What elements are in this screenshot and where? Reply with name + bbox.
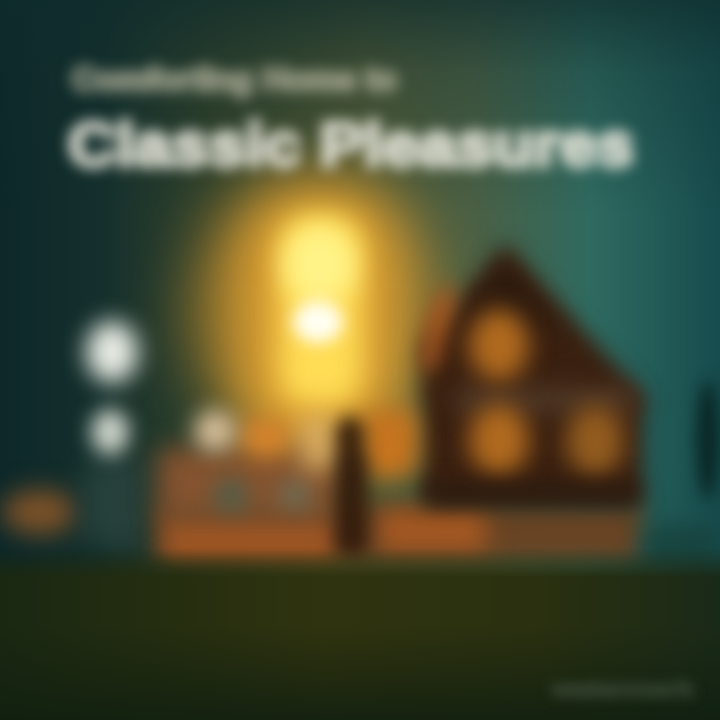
- central yellow light glow: [195, 175, 435, 455]
- house body and roof: [422, 244, 652, 502]
- window lower left: [469, 404, 529, 476]
- lit side room: [362, 408, 418, 478]
- roof shadow: [460, 258, 555, 330]
- low building left of figure: [158, 410, 342, 518]
- left small furniture block: orange: [2, 490, 78, 534]
- subtitle text: Comforting Home to: [72, 61, 397, 97]
- lantern post: [82, 460, 146, 545]
- house base: [425, 482, 640, 506]
- window lower right: [566, 405, 624, 477]
- house wall band: [455, 385, 635, 415]
- dark teal ground at right: [640, 525, 718, 570]
- bright light core: [293, 301, 343, 343]
- window top: [469, 309, 529, 381]
- standing figure silhouette: [336, 416, 367, 555]
- ground path orange: [155, 505, 643, 563]
- main title: Classic Pleasures: [68, 111, 634, 180]
- orange chimney side: [420, 280, 455, 370]
- left column lantern: [82, 321, 146, 545]
- house: [362, 244, 652, 506]
- dark tree on right edge: [697, 380, 719, 500]
- grass foreground: [0, 548, 720, 720]
- lower white light: [91, 409, 129, 455]
- upper white light: [86, 321, 138, 383]
- watermark bottom right: watermark: [551, 679, 695, 701]
